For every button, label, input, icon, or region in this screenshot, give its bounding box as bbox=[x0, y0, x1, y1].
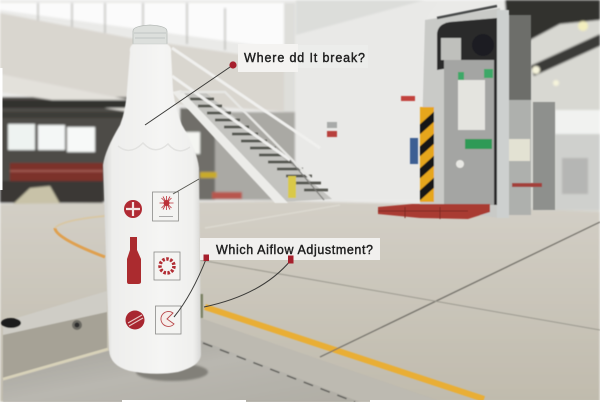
far wall bbox=[294, 0, 440, 200]
glass neck bbox=[133, 25, 167, 44]
upper windows bbox=[0, 3, 292, 50]
metal platform bbox=[1, 291, 442, 402]
callout: where did it break: Where dd It break? bbox=[244, 51, 365, 65]
icon: red plus circle bbox=[124, 200, 142, 218]
garage windows bbox=[8, 124, 35, 150]
bottle shadow bbox=[136, 363, 208, 381]
red machine in bay bbox=[10, 163, 103, 181]
red pallet bbox=[378, 204, 490, 219]
icon: ring of dots in box bbox=[154, 252, 180, 280]
icon: striped red circle bbox=[126, 310, 144, 330]
icon: pie in box bbox=[156, 306, 181, 334]
embossed pattern bbox=[118, 143, 190, 151]
icon: starburst in box bbox=[152, 192, 178, 221]
callout: which airflow adjustment bbox=[174, 238, 380, 317]
bottle body bbox=[103, 44, 201, 374]
hazard stripes bbox=[419, 106, 434, 202]
floor markings bbox=[55, 205, 600, 399]
floor bbox=[0, 201, 600, 402]
forklift shape bbox=[8, 186, 63, 209]
wall signs bbox=[327, 96, 418, 164]
callout: which airflow adjustment: Which Aiflow Adjustment? bbox=[216, 243, 373, 257]
left wall bbox=[0, 13, 292, 112]
icon: red bottle bbox=[127, 237, 141, 284]
callout: where did it break bbox=[145, 44, 368, 125]
bottle bbox=[103, 25, 201, 374]
staircase bbox=[172, 48, 332, 203]
garage bay bbox=[0, 97, 130, 202]
right background bbox=[530, 0, 600, 215]
connector: starburst icon bbox=[173, 179, 199, 194]
machine cabinet with door bbox=[378, 6, 555, 219]
